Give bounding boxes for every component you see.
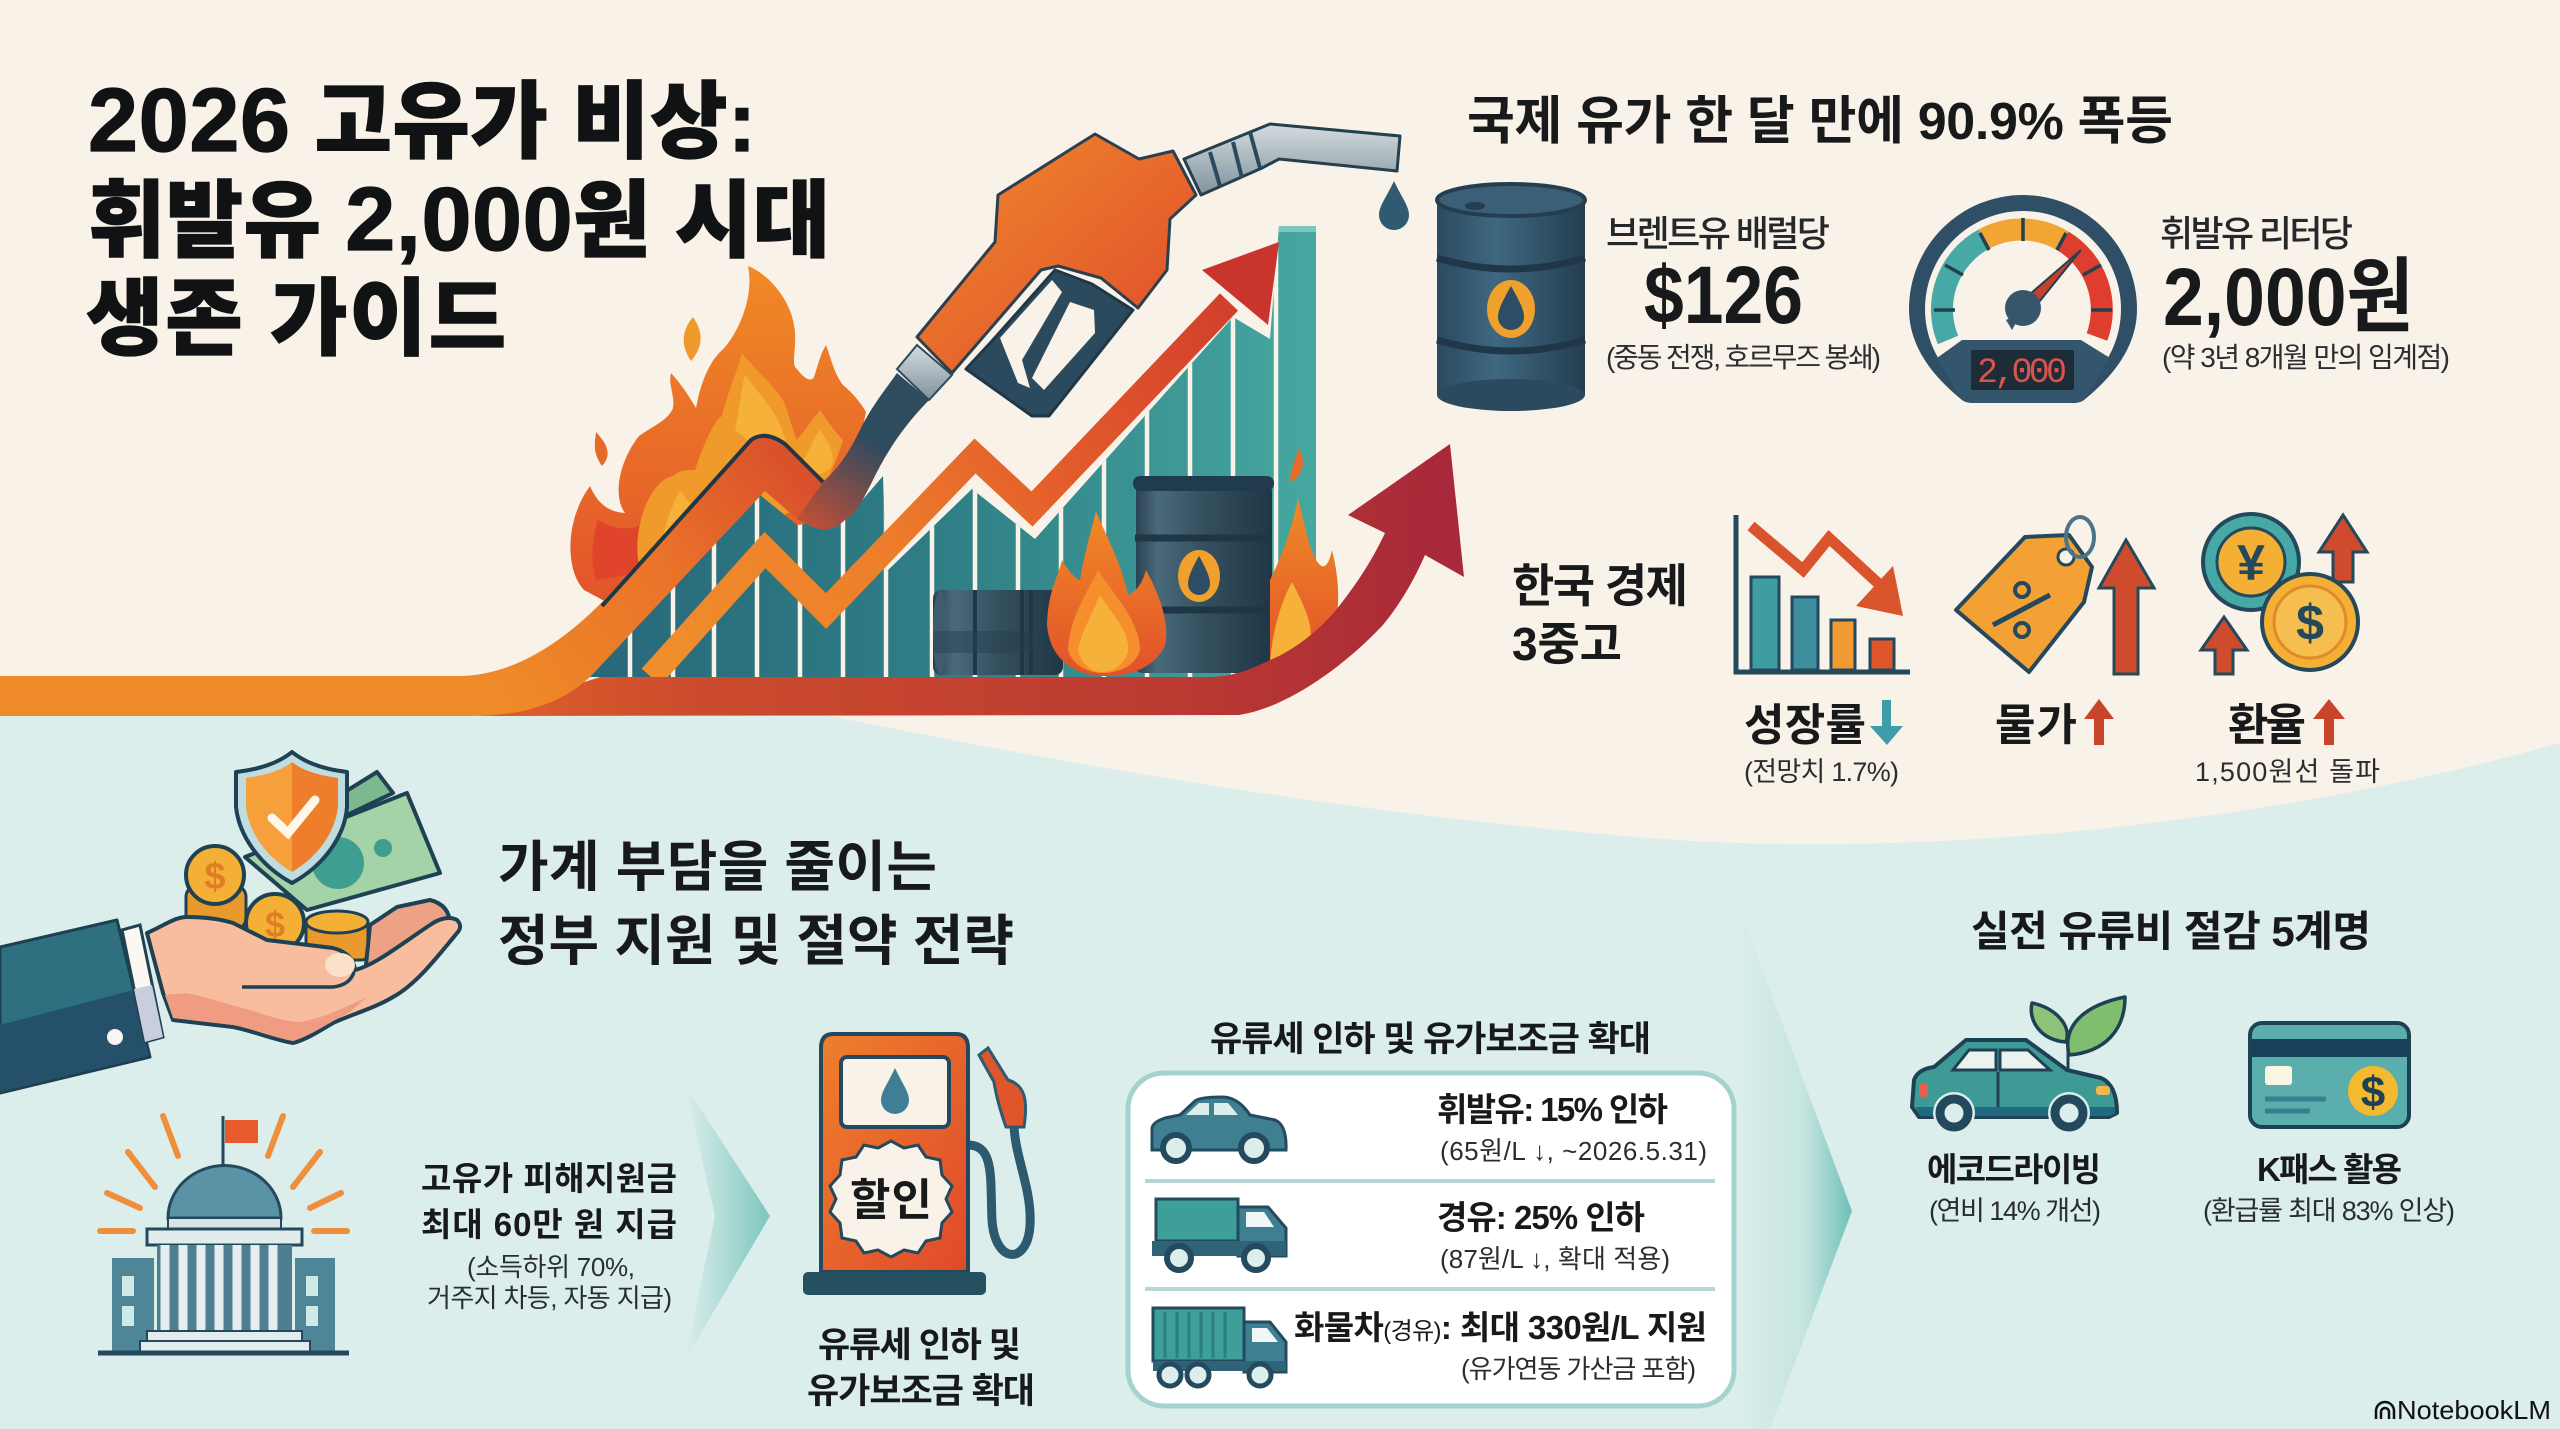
tip: K-pass	[2203, 1151, 2455, 1226]
heading: household burden	[498, 836, 1014, 972]
cuff lower shade	[134, 985, 163, 1042]
heading: triple burden: 한국 경제	[1512, 560, 1688, 612]
text: tax cut caption: 유류세 인하 및	[818, 1326, 1021, 1365]
fallen oil barrel	[933, 590, 1063, 675]
big red rising arrow	[480, 444, 1464, 716]
palm shadow	[165, 993, 367, 1041]
tip: eco driving: 에코드라이빙	[1927, 1151, 2101, 1188]
text: relief payment: 최대 60만 원 지급	[421, 1206, 677, 1243]
label: prices: 물가	[1995, 701, 2077, 750]
icon: K-pass card	[2250, 1023, 2409, 1127]
label: growth rate	[1744, 700, 1903, 787]
stat: brent: $126	[1644, 250, 1803, 341]
text: relief payment: 거주지 차등, 자동 지급)	[427, 1283, 672, 1313]
row: gasoline	[1437, 1091, 1707, 1166]
band outline	[602, 436, 823, 606]
suit sleeve	[0, 920, 150, 1093]
cash notes	[245, 772, 440, 910]
fuel nozzle	[897, 124, 1400, 416]
heading: five tips: 실전 유류비 절감 5계명	[1971, 908, 2371, 955]
icon: price tag with up arrow	[1956, 517, 2154, 674]
label: growth rate: 성장률	[1744, 701, 1866, 750]
upright oil barrel	[1133, 476, 1274, 673]
text: relief payment: 고유가 피해지원금	[421, 1160, 677, 1197]
tip: eco driving	[1927, 1151, 2101, 1226]
heading: triple burden	[1512, 560, 1688, 670]
heading: international oil price: 국제 유가 한 달 만에 90.9% 폭등	[1467, 93, 2173, 151]
chevron divider: tax to tips	[1735, 915, 1852, 1429]
label: exchange rate: 환율	[2228, 701, 2306, 750]
title: 2026 고유가 비상:	[88, 71, 756, 171]
heading: household burden: 정부 지원 및 절약 전략	[498, 910, 1014, 972]
stat: brent	[1606, 213, 1881, 373]
label: prices	[1995, 699, 2114, 750]
fuel hose	[797, 373, 929, 529]
stat: brent: 브렌트유 배럴당	[1606, 213, 1830, 254]
icon: speedometer gauge	[1909, 195, 2137, 407]
row: gasoline: 휘발유: 15% 인하	[1437, 1091, 1668, 1128]
stat: brent: (중동 전쟁, 호르무즈 봉쇄)	[1606, 342, 1881, 373]
logo: NotebookLM: NotebookLM	[2397, 1395, 2551, 1425]
icon: fuel pump with discount badge	[803, 1034, 1030, 1295]
row: diesel: 경유: 25% 인하	[1437, 1199, 1645, 1236]
coin stack left	[186, 846, 246, 930]
coin stack left: $	[204, 856, 226, 898]
icon: falling growth chart	[1736, 515, 1910, 672]
big flame behind chart	[570, 266, 866, 620]
stat: gasoline: 휘발유 리터당	[2160, 213, 2353, 254]
shield	[236, 752, 347, 883]
icon: speedometer gauge: 2,000	[1977, 353, 2067, 393]
cuff button	[107, 1029, 123, 1045]
row: gasoline: (65원/L ↓, ~2026.5.31)	[1440, 1136, 1707, 1166]
row: diesel	[1437, 1199, 1670, 1274]
label: exchange rate: 1,500원선 돌파	[2195, 757, 2380, 787]
sleeve shadow	[0, 990, 149, 1092]
stat: gasoline	[2160, 213, 2450, 373]
right flame	[1270, 448, 1338, 672]
icon: eco car with leaves	[1912, 997, 2125, 1134]
icon: hand holding money and shield	[0, 752, 460, 1093]
panel: fuel tax table	[1128, 1073, 1734, 1406]
tip: K-pass: (환급률 최대 83% 인상)	[2203, 1196, 2455, 1226]
thumb nail	[325, 953, 355, 977]
coin and stack on palm	[246, 894, 368, 960]
fuel drop	[1379, 181, 1409, 230]
label: exchange rate	[2195, 699, 2380, 787]
icon: government building	[98, 1116, 349, 1353]
icon: yen and dollar coins	[2201, 514, 2367, 674]
orange base stripe and rising band	[0, 436, 846, 716]
text: tax cut caption: 유가보조금 확대	[807, 1372, 1035, 1411]
icon: truck	[1152, 1199, 1286, 1270]
illustration: oil price surge with nozzle and flames	[0, 124, 1464, 716]
rising bar chart with white stripes	[587, 226, 1317, 678]
coin and stack on palm: $	[265, 904, 285, 945]
tip: eco driving: (연비 14% 개선)	[1929, 1196, 2101, 1226]
foreground flame	[1047, 511, 1166, 676]
heading: triple burden: 3중고	[1512, 618, 1622, 670]
background: mint lower section	[0, 716, 2560, 1429]
zigzag rising arrow	[651, 242, 1279, 677]
tip: K-pass: K패스 활용	[2257, 1151, 2402, 1188]
row: cargo: (유가연동 가산금 포함)	[1461, 1354, 1696, 1384]
icon: cargo truck	[1153, 1308, 1286, 1386]
stat: gasoline: (약 3년 8개월 만의 임계점)	[2162, 342, 2450, 373]
heading: tax table: 유류세 인하 및 유가보조금 확대	[1210, 1020, 1651, 1059]
stat: gasoline: 2,000원	[2163, 252, 2414, 343]
shirt cuff	[122, 925, 163, 1042]
title	[86, 71, 830, 366]
icon: K-pass card: $	[2361, 1068, 2385, 1117]
text: relief payment	[421, 1160, 677, 1313]
row: cargo	[1294, 1309, 1707, 1384]
text: relief payment: (소득하위 70%,	[467, 1252, 635, 1282]
text: tax cut caption	[807, 1326, 1035, 1411]
icon: oil barrel	[1437, 184, 1585, 411]
chevron divider: government to tax	[685, 1085, 770, 1360]
title: 휘발유 2,000원 시대	[88, 170, 830, 270]
heading: household burden: 가계 부담을 줄이는	[498, 836, 937, 898]
row: diesel: (87원/L ↓, 확대 적용)	[1440, 1244, 1670, 1274]
icon: yen and dollar coins: $	[2296, 595, 2324, 651]
hand	[147, 917, 460, 1043]
icon: fuel pump with discount badge: 할인	[850, 1176, 932, 1225]
icon: yen and dollar coins: ¥	[2237, 535, 2265, 591]
row: cargo: 화물차(경유): 최대 330원/L 지원	[1294, 1309, 1707, 1346]
label: growth rate: (전망치 1.7%)	[1744, 757, 1899, 787]
icon: car	[1152, 1097, 1286, 1161]
thumb crease	[242, 972, 354, 987]
title: 생존 가이드	[86, 272, 506, 366]
back fingers	[366, 900, 450, 980]
